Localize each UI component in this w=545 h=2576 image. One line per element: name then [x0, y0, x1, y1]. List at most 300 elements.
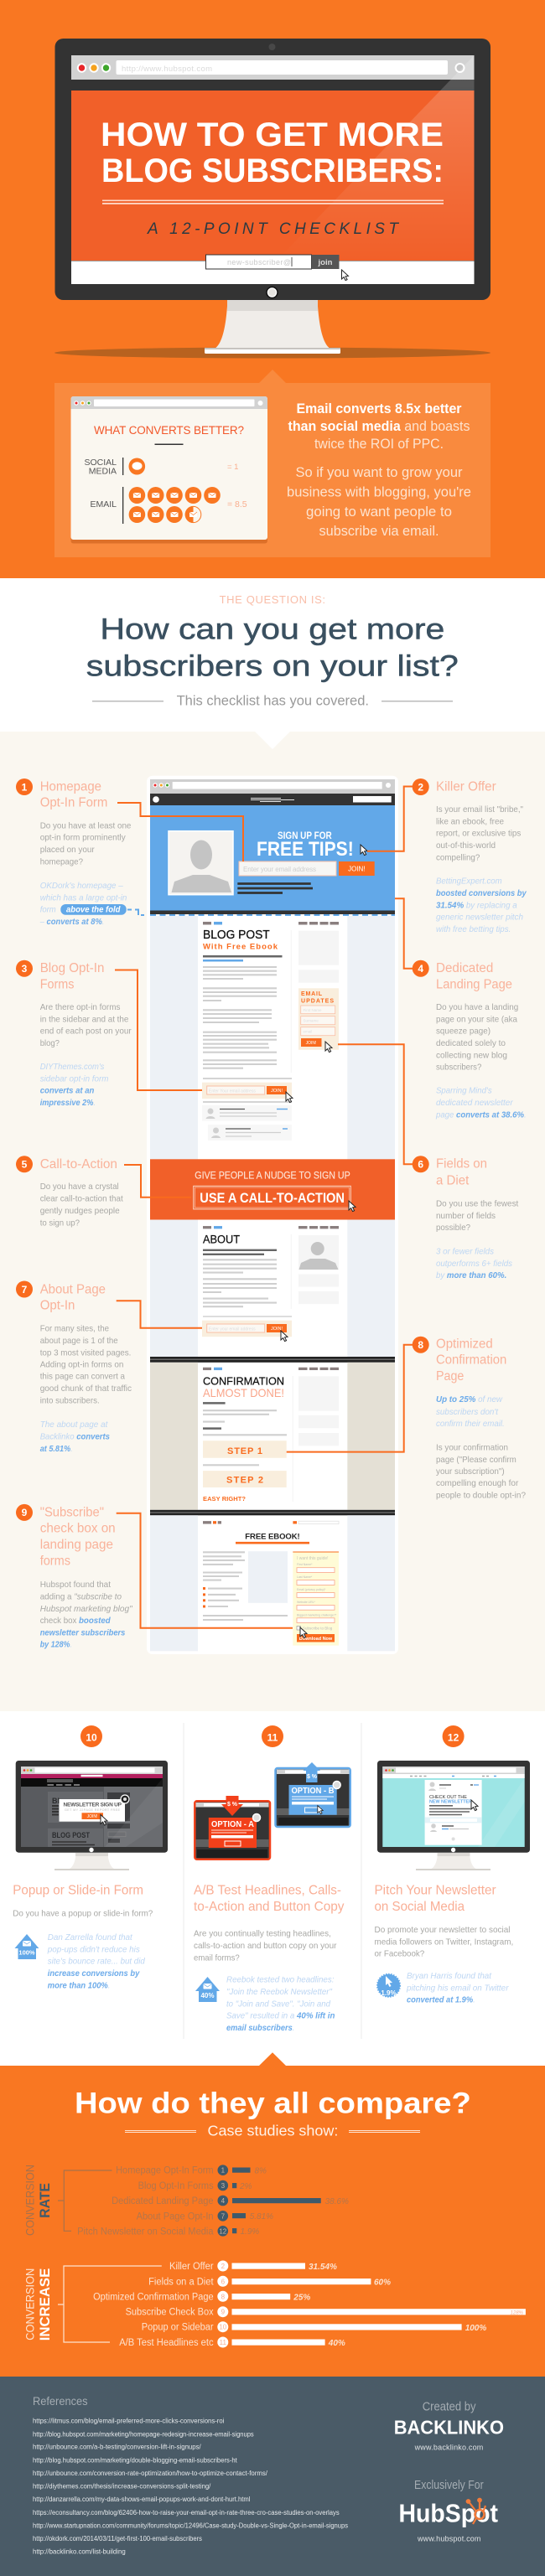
body 12: Do promote your newsletter to social: [374, 1926, 510, 1935]
landing form: Biggest marketing challenge?*: [297, 1614, 337, 1617]
confirmation page: ALMOST DONE!: [203, 1386, 284, 1399]
item 1: homepage opt-in form: [16, 778, 144, 927]
header background: [0, 0, 545, 578]
increase rows: 40%: [328, 2339, 345, 2348]
increase rows: Subscribe Check Box: [126, 2308, 214, 2318]
rate rows: 5.81%: [250, 2212, 273, 2222]
increase rows: 100%: [465, 2324, 486, 2333]
email updates widget: Surname: [304, 1019, 319, 1022]
stat 6: [436, 1247, 512, 1280]
blog sidebar: [298, 931, 339, 1053]
increase rows: 128%: [511, 2311, 524, 2316]
heading 1: Opt-In Form: [40, 796, 107, 810]
heading 3: [40, 961, 104, 991]
credit: backlinko: [394, 2400, 504, 2451]
option B popup: [288, 1785, 337, 1815]
blog post opt-in bar: JOIN!: [271, 1089, 283, 1094]
body 4: collecting new blog: [436, 1051, 507, 1060]
stat 10: Dan Zarrella found that: [48, 1933, 133, 1942]
body 7: good chunk of that traffic: [40, 1384, 132, 1394]
body 4: page on your site (aka: [436, 1015, 517, 1024]
credit: backlinko: www.backlinko.com: [414, 2443, 483, 2451]
option A card: $ %: [227, 1802, 238, 1808]
mock nav: [150, 794, 395, 805]
popup monitor: [16, 1761, 168, 1870]
body 10: Do you have a popup or slide-in form?: [13, 1910, 153, 1919]
references: http://blog.hubspot.com/marketing/homepage-redesign-increase-email-signups: [33, 2430, 254, 2438]
body 11: calls-to-action and button copy on your: [194, 1942, 337, 1951]
monitor stand: [215, 300, 330, 349]
landing copy lines: [203, 1552, 288, 1620]
body 1: opt-in form prominently: [40, 834, 126, 843]
badge 9: [16, 1504, 33, 1521]
option B arrow: [304, 1762, 320, 1782]
badge 4: 4: [418, 963, 423, 975]
intro copy: [287, 401, 471, 539]
heading 2: Killer Offer: [436, 779, 496, 794]
stat 10: pop-ups didn't reduce his: [47, 1945, 140, 1954]
stat 12: pitching his email on Twitter: [406, 1984, 509, 1993]
landing page: [150, 1515, 395, 1651]
stat 2: [436, 877, 527, 934]
popup monitor: BL: [52, 1797, 62, 1805]
step 2: [203, 1471, 287, 1487]
body 4: Do you have a landing: [436, 1003, 519, 1012]
body 2: like an ebook, free: [436, 817, 504, 826]
hero sign-up form: new-subscriber@: [227, 258, 291, 266]
title 11: A/B Test Headlines, Calls-: [194, 1884, 341, 1898]
tweet card: CHECK OUT THE: [429, 1795, 467, 1800]
title 11: [194, 1884, 344, 1914]
icon: badge 1.9%: [377, 1974, 400, 1997]
blog comments: [202, 1105, 292, 1141]
body 11: email forms?: [194, 1953, 240, 1963]
increase rows: 60%: [374, 2278, 391, 2288]
rate rows: 1.9%: [240, 2227, 259, 2237]
rate rows: Homepage Opt-In Form: [116, 2166, 214, 2176]
hero title: [101, 116, 444, 189]
references: http://www.startupnation.com/community/forums/topic/12496/Case-study-Double-vs-Single-Opt-in-email-signups: [33, 2522, 348, 2530]
hero title: HOW TO GET MORE: [101, 116, 444, 153]
increase rows: Optimized Confirmation Page: [93, 2292, 214, 2302]
increase rows: 11: [220, 2339, 226, 2346]
references: https://econsultancy.com/blog/62406-how-to-raise-your-email-opt-in-rate-three-cro-case-studies-on-overlays: [33, 2509, 340, 2517]
icon: up arrow 100%: [15, 1934, 39, 1959]
body 9: [40, 1580, 133, 1650]
call-to-action band: GIVE PEOPLE A NUDGE TO SIGN UP: [195, 1172, 350, 1182]
divider bar: [150, 1510, 395, 1515]
body 12: [374, 1926, 513, 1959]
references: http://backlinko.com/list-building: [33, 2548, 126, 2556]
landing form: Email (privacy policy)*: [297, 1588, 326, 1591]
increase rows: 2: [221, 2263, 226, 2270]
heading 7: [40, 1282, 106, 1313]
increase rows: 6: [221, 2278, 226, 2285]
hero sign-up form: [206, 255, 349, 281]
heading 8: [436, 1337, 506, 1384]
stat 8: subscribers don't: [436, 1408, 499, 1417]
item 6: fields on a diet: [413, 1156, 518, 1280]
rate rows: 7: [221, 2212, 226, 2220]
confirmation page: [150, 1363, 395, 1510]
badge 12: [443, 1725, 465, 1747]
body 2: Is your email list "bribe,": [436, 805, 523, 815]
social media row: MEDIA: [89, 466, 117, 476]
mock browser bar: [150, 779, 395, 794]
body 12: media followers on Twitter, Instagram,: [374, 1937, 513, 1947]
increase rows: A/B Test Headlines etc: [119, 2338, 214, 2348]
axis label increase: INCREASE: [37, 2268, 53, 2341]
heading 4: [436, 961, 512, 991]
badge 3: 3: [22, 963, 28, 975]
social media row: SOCIAL: [84, 458, 117, 468]
question heading: [86, 613, 459, 683]
references: http://unbounce.com/a-b-testing/conversion-lift-in-signups/: [33, 2444, 201, 2451]
about heading: ABOUT: [203, 1233, 240, 1245]
credit: hubspot: HubSpot: [399, 2498, 498, 2527]
badge 1: 1: [22, 781, 28, 793]
body 4: squeeze page): [436, 1027, 490, 1037]
call-to-action band: USE A CALL-TO-ACTION: [200, 1190, 345, 1206]
stat 3: [40, 1063, 109, 1108]
axis label increase: [23, 2268, 53, 2341]
body 4: [436, 1003, 519, 1073]
central website mockup: [147, 776, 398, 1654]
badge 9: 9: [22, 1507, 28, 1518]
rate rows: 38.6%: [325, 2197, 349, 2206]
stat 11: email subscribers.: [226, 2024, 294, 2033]
rate rows: 1: [221, 2167, 226, 2175]
rate rows: Blog Opt-In Forms: [138, 2181, 214, 2191]
icon: up arrow 100%: 100%: [18, 1949, 35, 1957]
hero copy: SIGN UP FOR: [278, 830, 332, 841]
title 12: [374, 1884, 496, 1914]
item 2: killer offer: [413, 778, 527, 934]
icon: hubspot sprocket: [467, 2499, 485, 2524]
body 9: newsletter subscribers: [40, 1629, 126, 1637]
stat 8: Up to 25% of new: [436, 1395, 503, 1404]
heading 9: "Subscribe": [40, 1505, 104, 1520]
body 1: [40, 821, 132, 866]
credit: backlinko: BACKLINKO: [394, 2416, 504, 2438]
step 1: STEP 1: [227, 1446, 262, 1456]
question heading: How can you get more: [100, 613, 444, 646]
body 6: Do you use the fewest: [436, 1199, 518, 1208]
option A card: OPTION - A: [211, 1820, 254, 1829]
stat 2: BettingExpert.com: [436, 877, 502, 887]
browser card: what converts better: [70, 396, 267, 543]
stat 6: 3 or fewer fields: [436, 1247, 494, 1256]
checklist section background: [0, 732, 545, 1711]
badge 8: [413, 1337, 429, 1353]
rate rows: [77, 2165, 349, 2237]
option B card: OPTION - B: [292, 1787, 334, 1796]
credit: hubspot: Exclusively For: [414, 2478, 484, 2492]
comparison section: [0, 2052, 545, 2377]
landing form: First Name*: [297, 1563, 313, 1566]
heading 4: Dedicated: [436, 961, 493, 975]
mock hero: Enter your email address: [243, 866, 316, 873]
heading 8: Optimized: [436, 1337, 493, 1352]
body 8: [436, 1443, 526, 1501]
badge 3: [16, 960, 33, 977]
body 6: number of fields: [436, 1212, 496, 1221]
heading 9: check box on: [40, 1522, 116, 1536]
comparison heading: How do they all compare?: [75, 2087, 471, 2120]
references: [33, 2394, 348, 2556]
body 9: Hubspot found that: [40, 1580, 111, 1590]
heading 8: Page: [436, 1369, 464, 1384]
email updates widget: [298, 988, 339, 1053]
popup dialog: JOIN!: [87, 1814, 97, 1819]
body 5: gently nudges people: [40, 1207, 120, 1216]
rate rows: 3: [221, 2182, 226, 2190]
item 5: call-to-action: [16, 1156, 123, 1228]
body 8: Is your confirmation: [436, 1443, 508, 1452]
stat 1: which has a large opt-in: [40, 893, 127, 903]
comparison subheading: Case studies show:: [208, 2122, 338, 2139]
intro copy: than social media and boasts: [288, 418, 470, 434]
about text lines: [203, 1260, 277, 1306]
badge 2: [413, 778, 429, 795]
stat 4: Sparring Mind's: [436, 1087, 492, 1096]
badge 10: 10: [86, 1731, 97, 1743]
item 7: about page opt-in: [16, 1280, 132, 1454]
heading 7: Opt-In: [40, 1299, 75, 1313]
body 9: adding a "subscribe to: [40, 1593, 122, 1602]
about opt-in bar: JOIN!: [271, 1327, 283, 1332]
question subhead: This checklist has you covered.: [177, 693, 369, 709]
body 4: subscribers?: [436, 1063, 482, 1073]
heading 6: [436, 1156, 487, 1187]
confirmation heading: CONFIRMATION: [203, 1375, 284, 1388]
landing form: Last Name*: [297, 1575, 313, 1579]
hero monitor: [54, 39, 490, 359]
credit: hubspot: [399, 2478, 498, 2542]
popup dialog: GET MY 22PAGE REPORT FREE: [65, 1808, 120, 1812]
stat 1: form: [40, 906, 56, 915]
item 8: optimized confirmation page: [413, 1337, 526, 1501]
stat 7: Backlinko converts: [40, 1433, 110, 1442]
body 5: [40, 1182, 123, 1228]
heading 9: landing page: [40, 1538, 113, 1552]
tweet card: [425, 1780, 482, 1845]
references: http://unbounce.com/conversion-rate-optimization/how-to-optimize-contact-forms/: [33, 2470, 268, 2477]
divider bar: [150, 1357, 395, 1363]
hero subtitle: A 12-POINT CHECKLIST: [147, 220, 399, 238]
body 11: Are you continually testing headlines,: [194, 1930, 331, 1939]
option A popup: [209, 1818, 257, 1848]
heading 3: Blog Opt-In: [40, 961, 104, 975]
monitor bezel: [55, 39, 490, 300]
badge 11: 11: [267, 1731, 278, 1743]
about opt-in bar: [202, 1316, 292, 1342]
step 1: [203, 1441, 287, 1458]
increase rows: 25%: [293, 2293, 310, 2303]
badge 6: [413, 1156, 429, 1172]
free ebook heading: FREE EBOOK!: [245, 1532, 300, 1541]
body 9: check box boosted: [40, 1616, 111, 1626]
stat 2: boosted conversions by: [436, 889, 527, 898]
stat 4: page converts at 38.6%.: [435, 1110, 527, 1120]
references: https://litmus.com/blog/email-preferred-more-clicks-conversions-roi: [33, 2418, 225, 2425]
email row: [90, 487, 247, 524]
social media row: = 1: [227, 463, 238, 472]
body 7: [40, 1325, 132, 1405]
body 7: Adding opt-in forms on: [40, 1361, 124, 1369]
body 4: dedicated solely to: [436, 1039, 506, 1048]
blog post page: With Free Ebook: [203, 943, 278, 952]
heading 1: Homepage: [40, 779, 101, 794]
body 8: page ("Please confirm: [436, 1456, 516, 1465]
body 2: compelling?: [436, 853, 480, 862]
stat 7: at 5.81%.: [40, 1445, 73, 1454]
stat 4: [435, 1087, 527, 1120]
intro copy: business with blogging, you're: [287, 484, 471, 500]
body 3: end of each post on your: [40, 1027, 132, 1037]
stat 1: [39, 882, 144, 927]
blog post page: [150, 916, 395, 1160]
references: http://okdork.com/2014/03/11/get-first-100-email-subscribers: [33, 2535, 202, 2542]
icon: badge 1.9%: 1.9%: [381, 1989, 397, 1997]
landing form: [293, 1552, 339, 1646]
badge 11: [262, 1725, 283, 1747]
badge 2: 2: [418, 781, 423, 793]
hero double rule: [102, 199, 444, 204]
axis label rate: RATE: [37, 2183, 53, 2218]
heading 9: [40, 1505, 116, 1569]
increase rows: 31.54%: [309, 2263, 337, 2272]
stat 11: [226, 1976, 335, 2033]
axis label rate: CONVERSION: [23, 2165, 37, 2236]
hero sign-up form: join: [318, 258, 333, 267]
stat 11: Reebok tested two headlines:: [226, 1976, 335, 1985]
body 2: out-of-this-world: [436, 841, 496, 851]
badge 6: 6: [418, 1159, 423, 1171]
mock hero: JOIN!: [348, 865, 366, 873]
body 3: blog?: [40, 1039, 60, 1048]
stat 4: dedicated newsletter: [436, 1099, 513, 1108]
email updates widget: JOIN!: [306, 1041, 316, 1046]
badge 5: 5: [22, 1159, 28, 1171]
body 7: into subscribers.: [40, 1396, 100, 1405]
badge 8: 8: [418, 1339, 423, 1351]
card heading: WHAT CONVERTS BETTER?: [94, 424, 244, 437]
body 1: Do you have at least one: [40, 821, 132, 830]
body 7: top 3 most visited pages.: [40, 1348, 131, 1358]
body 2: [436, 805, 523, 862]
intro panel: [54, 370, 490, 557]
landing form: Website URL*: [297, 1601, 316, 1604]
mock hero: FREE TIPS!: [257, 838, 354, 861]
badge 7: [16, 1280, 33, 1297]
browser bar: [71, 55, 475, 80]
credit: hubspot: www.hubspot.com: [417, 2534, 480, 2542]
email updates widget: UPDATES: [301, 998, 334, 1004]
about sidebar: [298, 1235, 339, 1304]
rate rows: 4: [221, 2197, 226, 2205]
stat 6: outperforms 6+ fields: [436, 1260, 512, 1269]
stat 11: Save" resulted in a 40% lift in: [226, 2012, 335, 2021]
item 9: subscribe check box: [16, 1504, 133, 1650]
axis label rate: [23, 2165, 53, 2236]
eyebrow: THE QUESTION IS:: [220, 593, 325, 606]
question heading: subscribers on your list?: [86, 650, 459, 683]
intro copy: twice the ROI of PPC.: [314, 436, 444, 452]
rate rows: Pitch Newsletter on Social Media: [77, 2227, 214, 2237]
stat 1: above the fold: [66, 906, 121, 915]
rate rows: About Page Opt-In: [137, 2211, 214, 2222]
icon: up arrow 40%: 40%: [200, 1992, 215, 1999]
portrait placeholder: [169, 831, 233, 895]
stat 7: The about page at: [40, 1420, 108, 1430]
body 3: Are there opt-in forms: [40, 1003, 120, 1012]
body 7: For many sites, the: [40, 1325, 109, 1334]
title 11: to-Action and Button Copy: [194, 1900, 344, 1914]
email updates widget: First Name: [304, 1008, 322, 1012]
badge 12: 12: [448, 1731, 459, 1743]
increase rows: 8: [221, 2293, 226, 2300]
body 5: clear call-to-action that: [40, 1195, 123, 1204]
screen: [71, 91, 475, 261]
references: References: [33, 2394, 87, 2408]
heading 4: Landing Page: [436, 977, 512, 991]
stat 10: more than 100%.: [48, 1981, 110, 1990]
body 6: [436, 1199, 518, 1233]
step 2: STEP 2: [226, 1475, 263, 1485]
references: http://diythemes.com/thesis/increase-conversions-split-testing/: [33, 2483, 211, 2491]
popup dialog: [59, 1795, 129, 1825]
column 11: a/b tests: [194, 1725, 350, 2033]
increase rows: Popup or Sidebar: [142, 2323, 214, 2333]
body 9: Hubspot marketing blog": [40, 1605, 133, 1614]
option B card: $ %: [307, 1774, 318, 1780]
option B card: [275, 1762, 350, 1827]
blog post text lines: [203, 967, 277, 1068]
landing bullets: [203, 1587, 205, 1607]
email updates widget: EMAIL: [301, 991, 323, 997]
footer: [0, 2377, 545, 2576]
heading 3: Forms: [40, 977, 75, 991]
confirmation sidebar: [298, 1376, 339, 1446]
badge 10: [80, 1725, 102, 1747]
body 5: to sign up?: [40, 1218, 80, 1228]
references: http://blog.hubspot.com/marketing/double-blogging-email-subscribers-ht: [33, 2456, 238, 2464]
stat 1: OKDork's homepage –: [40, 882, 123, 891]
icon: up arrow 40%: [195, 1977, 220, 2002]
stat 2: 31.54% by replacing a: [436, 901, 517, 910]
increase rows: Killer Offer: [169, 2262, 214, 2272]
popup dialog: NEWSLETTER SIGN UP: [64, 1803, 122, 1808]
email row: = 8.5: [227, 499, 247, 510]
body 3: [40, 1003, 132, 1048]
stat 12: [406, 1972, 509, 2005]
stat 10: increase conversions by: [48, 1969, 140, 1979]
references: http://danzarrella.com/my-data-shows-email-popups-work-and-dont-hurt.html: [33, 2496, 251, 2503]
body 8: your subscription"): [436, 1467, 505, 1477]
title 12: Pitch Your Newsletter: [374, 1884, 496, 1898]
heading 6: Fields on: [436, 1156, 487, 1171]
landing form: I want this guide!: [297, 1556, 329, 1561]
heading 7: About Page: [40, 1282, 106, 1297]
stat 10: [47, 1933, 146, 1990]
rate rows: 8%: [255, 2167, 267, 2175]
intro copy: Email converts 8.5x better: [297, 401, 462, 416]
stat 3: sidebar opt-in form: [40, 1074, 109, 1084]
stat 7: [40, 1420, 110, 1454]
three-column tips section: [13, 1723, 530, 2039]
item 3: blog opt-in forms: [16, 960, 132, 1108]
